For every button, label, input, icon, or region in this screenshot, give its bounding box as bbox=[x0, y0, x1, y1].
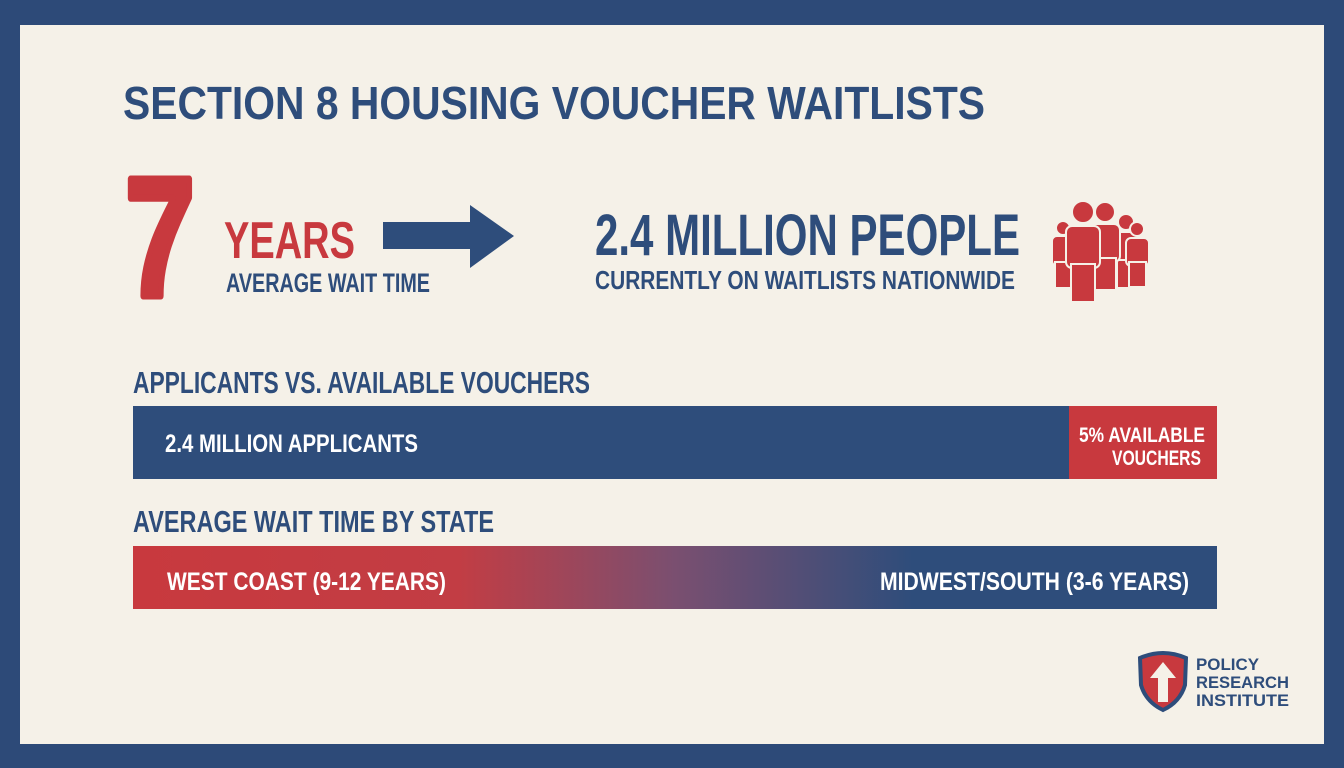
gradient bar: wait time by region: MIDWEST/SOUTH (3-6 YEARS) bbox=[880, 568, 1189, 596]
bar chart: applicants vs vouchers bbox=[133, 406, 1217, 479]
arrow bbox=[383, 205, 514, 268]
heading: wait time by state: AVERAGE WAIT TIME BY STATE bbox=[133, 504, 494, 539]
logo: policy research institute: POLICY bbox=[1196, 655, 1260, 674]
stat: 2.4 million people: 2.4 MILLION PEOPLE bbox=[595, 203, 1020, 268]
stat: 2.4 million people: CURRENTLY ON WAITLISTS NATIONWIDE bbox=[595, 265, 1015, 295]
heading: applicants vs vouchers: APPLICANTS VS. AVAILABLE VOUCHERS bbox=[133, 365, 590, 400]
bar chart: applicants vs vouchers: VOUCHERS bbox=[1112, 447, 1201, 470]
bar chart: applicants vs vouchers: 5% AVAILABLE bbox=[1079, 424, 1205, 447]
bar chart: applicants vs vouchers: 2.4 MILLION APPLICANTS bbox=[165, 430, 418, 458]
stat: 2.4 million people bbox=[595, 203, 1020, 295]
stat: 7 years bbox=[125, 143, 430, 333]
gradient bar: wait time by region: WEST COAST (9-12 YEARS) bbox=[167, 568, 446, 596]
stat: 7 years: AVERAGE WAIT TIME bbox=[226, 268, 430, 298]
stat: 7 years: YEARS bbox=[224, 212, 355, 270]
logo: policy research institute: RESEARCH bbox=[1196, 673, 1289, 692]
logo: policy research institute bbox=[1140, 653, 1289, 710]
gradient bar: wait time by region bbox=[133, 546, 1217, 609]
logo: policy research institute: INSTITUTE bbox=[1196, 691, 1289, 710]
icon: people group bbox=[1052, 201, 1149, 302]
title: SECTION 8 HOUSING VOUCHER WAITLISTS bbox=[123, 77, 985, 129]
stat: 7 years: 7 bbox=[125, 143, 195, 333]
